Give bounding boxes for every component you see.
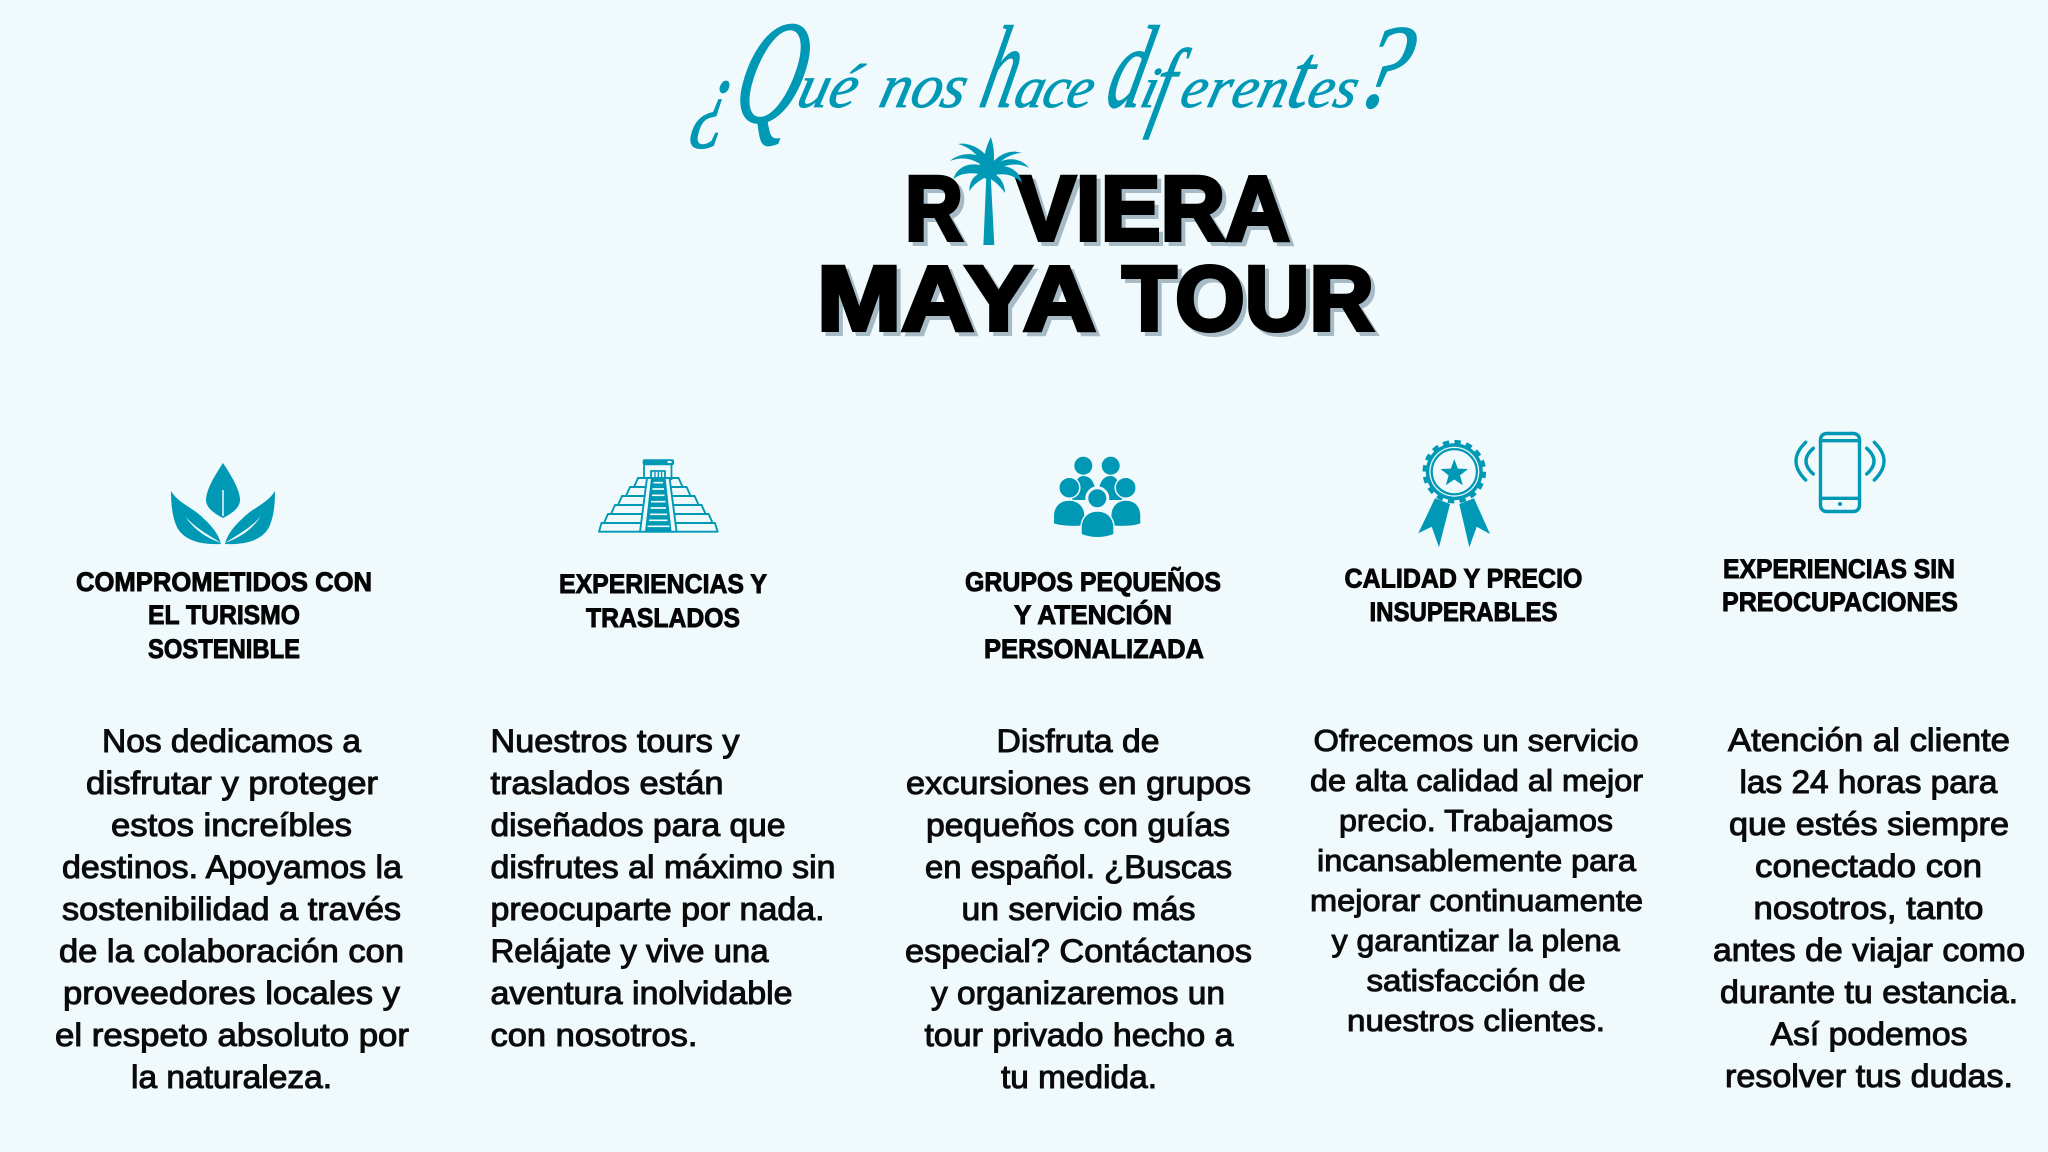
text block: un servicio más: [962, 891, 1196, 927]
text block: sostenibilidad a través: [62, 891, 401, 927]
text block: tour privado hecho a: [924, 1017, 1234, 1053]
heading: EXPERIENCIAS Y: [559, 569, 767, 599]
heading: [1722, 554, 1958, 617]
text block: satisfacción de: [1366, 963, 1586, 998]
logo words: Maya Tour: TOUR: [1122, 248, 1374, 350]
logo word: Riviera: R: [905, 158, 963, 260]
title: script heading: i: [1135, 56, 1167, 120]
title: script heading: h: [970, 3, 1037, 133]
text block: Ofrecemos un servicio: [1314, 723, 1638, 758]
text block: destinos. Apoyamos la: [62, 849, 402, 885]
text block: [905, 723, 1252, 1095]
title: script heading: nos: [874, 52, 976, 121]
heading: GRUPOS PEQUEÑOS: [965, 567, 1221, 597]
text block: nuestros clientes.: [1347, 1003, 1605, 1038]
text block: Así podemos: [1770, 1016, 1968, 1052]
heading: TRASLADOS: [586, 603, 740, 633]
text block: que estés siempre: [1729, 806, 2009, 842]
text block: de la colaboración con: [59, 933, 404, 969]
panel: small groups: [905, 457, 1252, 1095]
heading: INSUPERABLES: [1370, 597, 1558, 627]
heading: Y ATENCIÓN: [1014, 600, 1172, 630]
text block: disfrutar y proteger: [86, 765, 378, 801]
text block: [1310, 723, 1643, 1038]
text block: [490, 723, 836, 1053]
title: script heading: d: [1097, 2, 1166, 133]
icon: Mayan pyramid: [599, 459, 718, 532]
logo words: Maya Tour: MAYA: [817, 248, 1096, 350]
panel: experiences and transfers: [490, 459, 836, 1053]
text block: y organizaremos un: [931, 975, 1225, 1011]
text block: y garantizar la plena: [1332, 923, 1620, 958]
text block: especial? Contáctanos: [905, 933, 1252, 969]
heading: [559, 569, 767, 633]
title: script heading: f: [1142, 31, 1197, 141]
icon: vibrating phone: [1796, 434, 1884, 512]
heading: [1344, 564, 1582, 627]
text block: Nuestros tours y: [490, 723, 740, 759]
text block: Atención al cliente: [1728, 722, 2010, 758]
text block: el respeto absoluto por: [55, 1017, 409, 1053]
text block: pequeños con guías: [926, 807, 1230, 843]
text block: disfrutes al máximo sin: [490, 849, 836, 885]
heading: [76, 567, 372, 664]
icon: palm tree: [950, 137, 1029, 245]
text block: Disfruta de: [996, 723, 1160, 759]
panel: sustainable tourism: [55, 463, 409, 1095]
text block: con nosotros.: [490, 1017, 698, 1053]
heading: SOSTENIBLE: [148, 634, 300, 664]
heading: EL TURISMO: [148, 600, 300, 630]
heading: CALIDAD Y PRECIO: [1344, 564, 1582, 594]
text block: incansablemente para: [1317, 843, 1637, 878]
text block: en español. ¿Buscas: [925, 849, 1232, 885]
text block: las 24 horas para: [1740, 764, 1998, 800]
text block: nosotros, tanto: [1754, 890, 1984, 926]
text block: antes de viajar como: [1713, 932, 2025, 968]
icon: leaves: [171, 463, 275, 544]
icon: award ribbon: [1418, 442, 1490, 547]
text block: excursiones en grupos: [906, 765, 1251, 801]
title: script heading: ué: [792, 52, 870, 121]
heading: PREOCUPACIONES: [1722, 587, 1958, 617]
text block: precio. Trabajamos: [1339, 803, 1613, 838]
title: script heading: [683, 0, 1430, 155]
icon: group of people: [1053, 457, 1141, 537]
heading: PERSONALIZADA: [984, 634, 1204, 664]
logo word: Riviera: [905, 158, 1290, 260]
heading: COMPROMETIDOS CON: [76, 567, 372, 597]
heading: [965, 567, 1221, 664]
title: script heading: ace: [1009, 56, 1103, 120]
logo words: Maya Tour: [817, 248, 1374, 350]
text block: Relájate y vive una: [490, 933, 769, 969]
text block: tu medida.: [1001, 1059, 1157, 1095]
title: script heading: es: [1302, 56, 1366, 120]
logo: Riviera Maya Tour: [817, 158, 1374, 350]
logo word: Riviera: VIERA: [1016, 158, 1290, 260]
title: script heading: ?: [1343, 0, 1428, 133]
text block: durante tu estancia.: [1720, 974, 2018, 1010]
title: script heading: ¿: [684, 40, 749, 150]
text block: traslados están: [490, 765, 724, 801]
heading: EXPERIENCIAS SIN: [1723, 554, 1955, 584]
text block: preocuparte por nada.: [490, 891, 824, 927]
panel: worry-free experiences: [1713, 434, 2025, 1094]
text block: conectado con: [1755, 848, 1982, 884]
text block: mejorar continuamente: [1310, 883, 1643, 918]
text block: proveedores locales y: [63, 975, 400, 1011]
text block: [1713, 722, 2025, 1094]
text block: estos increíbles: [111, 807, 352, 843]
title: script heading: eren: [1175, 56, 1297, 120]
panel: quality and price: [1310, 442, 1643, 1038]
text block: la naturaleza.: [131, 1059, 332, 1095]
text block: de alta calidad al mejor: [1310, 763, 1643, 798]
title: script heading: t: [1279, 25, 1328, 127]
text block: Nos dedicamos a: [102, 723, 361, 759]
text block: diseñados para que: [490, 807, 786, 843]
text block: aventura inolvidable: [490, 975, 792, 1011]
text block: resolver tus dudas.: [1725, 1058, 2013, 1094]
text block: [55, 723, 409, 1095]
